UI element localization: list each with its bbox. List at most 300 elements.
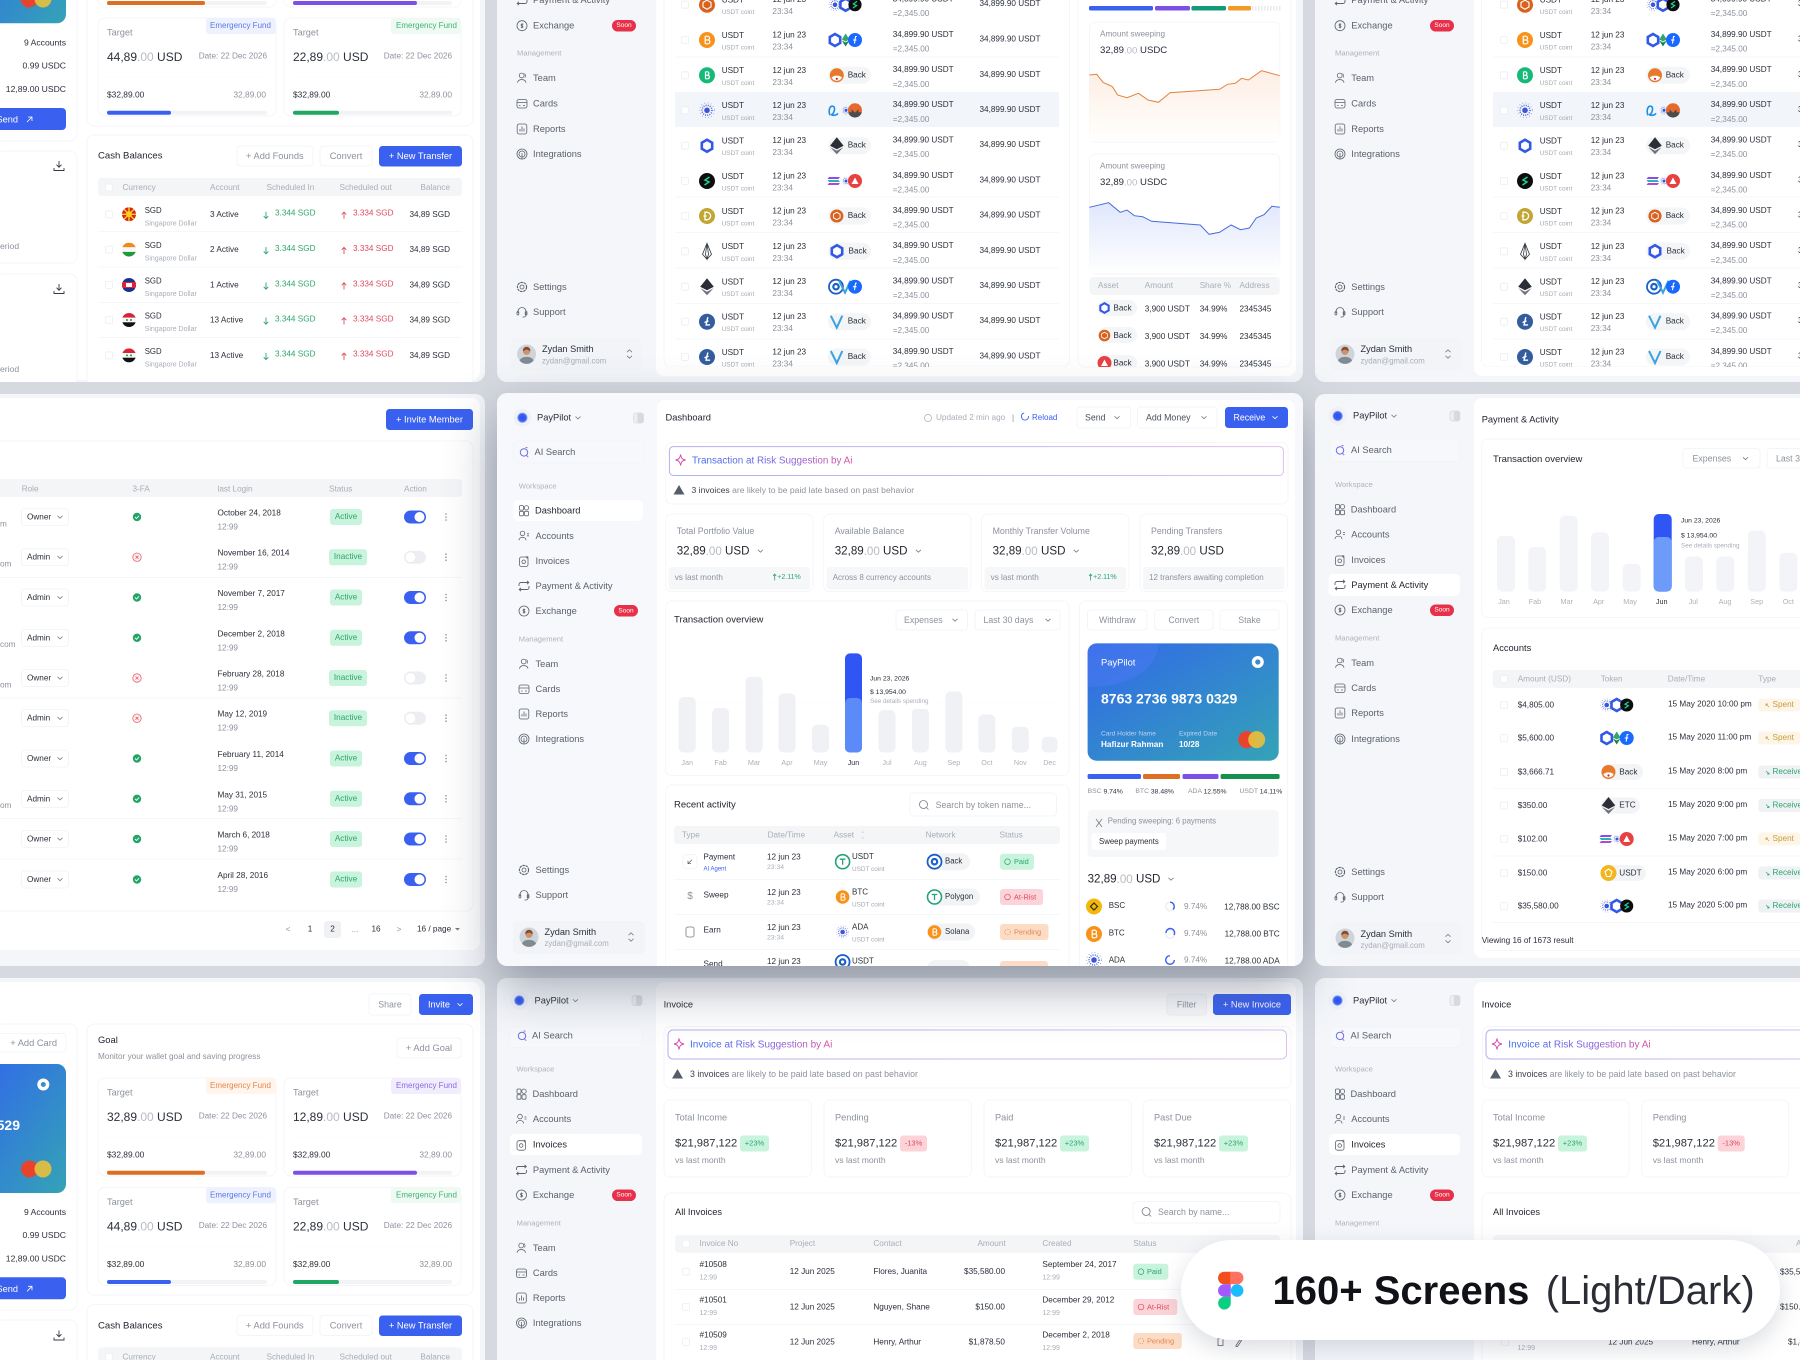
account row: $4,805.00 (1518, 700, 1555, 710)
member row (22, 670, 447, 692)
stat card: pending transfers: 32,89.00 USD (1151, 544, 1224, 558)
coin row (682, 206, 1040, 230)
panel: sweep analytics: Share % (1200, 281, 1231, 290)
panel: transaction overview bar chart: Expenses (1692, 454, 1732, 464)
coin row: =2,345.00 (1711, 220, 1748, 230)
invoice row: $35,580.00 (964, 1267, 1005, 1276)
stat card: monthly transfer volume: +2.11% (1093, 574, 1117, 581)
asset table: Back (1113, 331, 1133, 340)
coin row (682, 171, 1040, 194)
chart tooltip (1675, 514, 1748, 555)
invoice row: Flores, Juanita (873, 1267, 928, 1276)
panel: transaction overview bar chart: Apr (781, 758, 793, 767)
asset list: 9.74% (1184, 956, 1207, 964)
asset balance total: 32,89.00 USD (1088, 872, 1160, 886)
coin row: =2,345.00 (893, 326, 930, 335)
member row: November 16, 2014 (218, 549, 290, 558)
member row: Owner (27, 875, 51, 884)
member row: February 28, 2018 (218, 670, 285, 678)
invoice row: 12 Jun 2025 (790, 1302, 835, 1312)
panel: transaction overview bar chart: May (1623, 597, 1637, 606)
stat card: total income: +23% (1563, 1138, 1583, 1148)
coin row: 12 jun 23 (1591, 348, 1625, 356)
member row: Owner (27, 834, 51, 844)
coin row: 34,899.90 USDT (1711, 277, 1772, 286)
coin row: 34,899.90 USDT (980, 140, 1040, 149)
account row: USDT (1619, 868, 1642, 878)
stat card: total portfolio value: vs last month (675, 573, 723, 582)
coin row: 34,899.90 USDT (893, 171, 954, 180)
member row (22, 508, 447, 532)
page header (666, 407, 1288, 428)
target card green: $32,89.00 (293, 90, 331, 100)
AI suggestion panel: Invoice at Risk Suggestion by Ai (1508, 1040, 1651, 1050)
stat card: available balance: Available Balance (835, 526, 905, 536)
asset list: 12,788.00 BTC (1225, 930, 1280, 938)
sidebar navigation: Workspace (519, 482, 557, 490)
invoice row: 12:99 (700, 1345, 717, 1352)
panel: cash balances: Cash Balances (98, 150, 163, 162)
coin row: Back (848, 246, 868, 255)
panel: goal targets (87, 0, 473, 126)
coin row: 34,899.90 USDT (893, 30, 954, 39)
statement cards with download icons: eriod (0, 364, 19, 374)
coin row highlighted: USDT coint (1540, 115, 1572, 122)
page header: Receive (1234, 412, 1265, 422)
sidebar navigation: Management (1335, 1218, 1380, 1228)
callout: 160+ screens pill (1181, 1240, 1780, 1340)
stat card: past due: $21,987,122 (1154, 1138, 1216, 1150)
coin row: 23:34 (1591, 218, 1612, 228)
coin row: 23:34 (1591, 184, 1612, 192)
sidebar navigation: Payment & Activity (533, 1165, 610, 1175)
coin row (1500, 241, 1800, 265)
panel: transaction overview bar chart: Fab (1529, 597, 1541, 606)
coin row (1500, 0, 1800, 18)
sidebar navigation: zydan@gmail.com (542, 356, 606, 366)
coin row: USDT coint (1540, 9, 1572, 16)
panel: accounts table: Type (1758, 674, 1776, 684)
member row: Active (335, 633, 358, 642)
panel: accounts table: Accounts (1493, 643, 1532, 653)
coin row: USDT coint (722, 362, 754, 368)
coin row: =2,345.00 (1711, 150, 1748, 159)
sidebar navigation: Workspace (1335, 480, 1373, 489)
panel: all invoices table: All Invoices (1493, 1207, 1540, 1217)
member row: 12:99 (218, 844, 238, 854)
member row: 12:99 (218, 643, 238, 652)
sidebar navigation: Team (533, 1243, 556, 1253)
cash row: 3.334 SGD (353, 350, 394, 359)
activity row: sweep: $ (687, 891, 693, 902)
coin row: 23:34 (1591, 42, 1612, 52)
pagination: ... (352, 925, 358, 934)
target card purple: Target (293, 1088, 319, 1098)
panel: transaction overview bar chart: Oct (981, 758, 992, 767)
activity row: payment (683, 852, 1034, 873)
stat card: past due: +23% (1224, 1138, 1244, 1148)
activity row: earn: 12 jun 23 (767, 923, 801, 932)
cash row: Singapore Dollar (145, 361, 198, 368)
cash row (106, 312, 450, 333)
invoice row (682, 1260, 1168, 1282)
stat card: pending (824, 1100, 972, 1177)
stat card: total portfolio value: +2.11% (777, 574, 801, 581)
activity row: payment: AI Agent (704, 867, 727, 873)
panel: payment and activity screen, middle right (1315, 394, 1800, 966)
coin row: Back (1666, 352, 1685, 361)
activity row: send (704, 955, 1048, 977)
panel: all invoices table: Henry, Arthur (1692, 1338, 1740, 1346)
coin row: 12 jun 23 (1591, 66, 1625, 75)
sidebar navigation: Integrations (533, 1318, 582, 1328)
panel: transaction overview bar chart: Mar (1561, 597, 1573, 606)
activity row: earn: USDT coint (852, 936, 885, 944)
page header with filter and new invoice buttons: Filter (1177, 1000, 1197, 1010)
member row: Owner (27, 674, 51, 682)
AI suggestion panel: 3 invoices are likely to be paid late based on past behavior (1508, 1069, 1736, 1079)
target card green: $32,89.00 (293, 1259, 331, 1269)
activity row: send: Send (704, 960, 723, 968)
cash row: 3.344 SGD (275, 244, 316, 253)
coin row (681, 348, 1040, 367)
sidebar navigation: Zydan Smith (1360, 344, 1412, 354)
coin row: =2,345.00 (893, 186, 930, 194)
panel: card and asset summary: Stake (1238, 615, 1261, 625)
account row: 15 May 2020 9:00 pm (1668, 800, 1747, 809)
target card green: Emergency Fund (396, 1190, 457, 1199)
pending sweeping box: Pending sweeping: 6 payments (1108, 816, 1216, 826)
panel: accounts table (1482, 628, 1800, 950)
sidebar navigation: Exchange (536, 606, 577, 616)
coin row: Back (1666, 317, 1685, 326)
sidebar navigation: PayPilot (1353, 410, 1388, 420)
cash row: 3.344 SGD (275, 314, 316, 323)
activity row: sweep: 12 jun 23 (767, 888, 801, 897)
sidebar navigation: Invoices (1351, 1140, 1386, 1150)
coin row: 34,899.90 USDT (1711, 206, 1772, 215)
coin row: USDT (1540, 31, 1562, 40)
coin row highlighted: 12 jun 23 (1591, 101, 1625, 110)
target card green: Target (293, 1197, 319, 1207)
panel: all invoices table: 12 Jun 2025 (1608, 1338, 1654, 1346)
panel: members table: Action (404, 484, 427, 493)
panel: transaction overview bar chart: Aug (1719, 597, 1731, 606)
panel: transaction overview bar chart: Jan (1498, 597, 1510, 606)
coin row: 34,899.90 USDT (980, 70, 1040, 79)
coin row (682, 65, 1040, 89)
stat card: past due (1143, 1100, 1291, 1177)
panel: accounts table: Token (1601, 674, 1623, 684)
cash row (106, 206, 450, 227)
asset list: 9.74% (1184, 902, 1207, 911)
sidebar navigation: Soon (1434, 22, 1450, 29)
coin row: USDT (1540, 136, 1562, 145)
target card purple: 12,89.00 USD (293, 1110, 369, 1124)
cash row: SGD (145, 347, 162, 356)
member row: Active (335, 794, 358, 803)
panel: transaction overview bar chart: Jun (848, 758, 859, 767)
panel: transaction overview bar chart: Apr (1593, 597, 1605, 606)
activity row: earn: Pending (1014, 928, 1041, 936)
sidebar navigation: Integrations (533, 149, 582, 159)
coin row: USDT coint (722, 150, 754, 157)
panel: transaction overview bar chart: Jun (1656, 597, 1667, 606)
coin row: 12 jun 23 (772, 277, 807, 286)
account row: 15 May 2020 11:00 pm (1668, 732, 1751, 742)
coin row: 34,899.90 USDT (893, 241, 954, 250)
coin row: USDT (1540, 242, 1562, 251)
page header with filter and new invoice buttons: Invoice (664, 1000, 693, 1010)
invoice row: 12:99 (1042, 1345, 1060, 1352)
panel: goal targets: Goal (98, 1034, 118, 1045)
cash row (106, 276, 450, 298)
panel: all invoices table (664, 1193, 1291, 1360)
account row: 15 May 2020 6:00 pm (1668, 868, 1747, 876)
panel: all invoices table: Project (790, 1239, 816, 1248)
activity row: payment: 23:34 (767, 864, 784, 871)
sidebar navigation: PayPilot (1353, 996, 1388, 1006)
account row: $3,666.71 (1518, 768, 1555, 776)
sidebar navigation: AI Search (1351, 445, 1392, 455)
sidebar navigation: Workspace (1335, 1064, 1373, 1074)
coin row: USDT (722, 278, 744, 287)
coin row: 34,899.90 USDT (893, 312, 954, 321)
sidebar navigation: Reports (1351, 708, 1384, 718)
sidebar navigation: Soon (1434, 606, 1450, 614)
share and invite buttons: Invite (428, 1000, 450, 1010)
sidebar navigation: Dashboard (535, 506, 580, 516)
member row: Admin (27, 794, 51, 803)
member row: December 2, 2018 (218, 629, 285, 638)
sidebar navigation: AI Search (1350, 1030, 1391, 1040)
sidebar navigation: Exchange (1351, 1190, 1393, 1200)
coin row: USDT (722, 31, 744, 40)
coin row: 34,899.90 USDT (1711, 30, 1772, 39)
target card purple: $32,89.00 (293, 1150, 331, 1160)
coin row: 34,899.90 USDT (980, 316, 1040, 325)
invoice row: 12 Jun 2025 (790, 1267, 835, 1276)
callout text: (Light/Dark) (1546, 1269, 1755, 1313)
panel: sweep analytics (1078, 0, 1291, 371)
target card blue (98, 18, 276, 116)
invoice row: $150.00 (975, 1302, 1005, 1312)
target card blue: 32,89.00 (233, 1259, 266, 1269)
target card blue: Emergency Fund (210, 1190, 271, 1199)
coin row: 12 jun 23 (772, 242, 807, 251)
sidebar navigation: Cards (1351, 683, 1376, 693)
coin row: USDT (1540, 172, 1562, 181)
panel: recent activity table: Network (926, 830, 957, 840)
sidebar navigation: Zydan Smith (544, 927, 596, 937)
coin row: =2,345.00 (893, 220, 930, 230)
coin row: 34,899.90 USDT (980, 246, 1040, 255)
coin row: =2,345.00 (1711, 80, 1748, 89)
page heading: Invoice (1482, 1000, 1511, 1010)
panel: members table: 3-FA (132, 484, 150, 493)
target card orange (98, 1078, 276, 1176)
coin row: 34,899.90 USDT (893, 206, 954, 215)
panel: cash balances: + New Transfer (389, 1320, 452, 1330)
panel: invoices screen, bottom centre (497, 978, 1303, 1360)
wallet card (0, 1024, 77, 1360)
coin row: 34,899.90 USDT (893, 277, 954, 286)
stat card: monthly transfer volume (982, 514, 1129, 592)
stat card: pending: $21,987,122 (835, 1138, 897, 1150)
stat card: total income: Total Income (1493, 1113, 1545, 1123)
coin row: 23:34 (1591, 78, 1612, 87)
coin row: =2,345.00 (893, 44, 930, 54)
coin row: USDT coint (1540, 150, 1572, 157)
stat card: paid: vs last month (995, 1155, 1046, 1165)
sidebar navigation: Team (1351, 73, 1374, 83)
cash row: 13 Active (210, 316, 244, 324)
account row: $5,600.00 (1518, 734, 1555, 742)
coin row: USDT coint (722, 80, 754, 87)
invoice row: 12:99 (1042, 1310, 1060, 1317)
sidebar navigation: Dashboard (532, 1089, 578, 1099)
panel: card and asset summary: Withdraw (1099, 615, 1136, 625)
panel: cash balances: Balance (420, 183, 450, 192)
target card green (284, 18, 461, 116)
member row (22, 830, 447, 854)
coin row: =2,345.00 (1711, 291, 1748, 300)
stat card: pending: Pending (1653, 1113, 1686, 1123)
wallet card: + Add Card (10, 1038, 57, 1048)
member row: Inactive (334, 673, 363, 682)
coin row: =2,345.00 (1711, 44, 1748, 54)
wallet card with send button: 0.99 USDC (23, 60, 66, 70)
activity row: payment: Payment (704, 853, 736, 862)
credit card: 10/28 (1179, 740, 1200, 749)
coin row: USDT (1540, 278, 1562, 287)
member row: Admin (27, 633, 51, 642)
coin row: 34,899.90 USDT (1711, 241, 1772, 250)
coin row: 12 jun 23 (772, 206, 807, 216)
coin row: 12 jun 23 (772, 30, 807, 40)
member row: Active (335, 754, 358, 762)
activity row: sweep: 23:34 (767, 900, 784, 906)
sidebar navigation: zydan@gmail.com (544, 939, 609, 948)
sidebar navigation: Team (533, 73, 556, 83)
invoice row: Nguyen, Shane (873, 1302, 930, 1312)
coin row: 23:34 (772, 324, 793, 333)
activity row: payment: USDT coint (852, 866, 885, 873)
coin row: 12 jun 23 (1591, 206, 1625, 216)
page header with filter and new invoice buttons (664, 994, 1291, 1015)
page header with filter and new invoice buttons: + New Invoice (1223, 1000, 1281, 1010)
panel: cash balances: Account (210, 183, 240, 192)
credit card: Hafizur Rahman (1101, 740, 1163, 749)
coin row: 12 jun 23 (772, 172, 807, 180)
sidebar navigation: Settings (1351, 282, 1385, 292)
member row (22, 750, 447, 773)
member row (22, 871, 447, 894)
chart tooltip (864, 672, 937, 709)
chart tooltip: $ 13,954.00 (870, 689, 906, 696)
coin row (682, 0, 1040, 18)
member row: Active (335, 592, 358, 602)
stat card: available balance: Across 8 currency accounts (833, 573, 931, 582)
activity row: payment: Back (945, 857, 962, 866)
pagination: 1 (308, 924, 313, 934)
sidebar navigation: Reports (536, 709, 568, 719)
panel: members table: om (0, 560, 12, 568)
invoice row: Henry, Arthur (873, 1338, 921, 1346)
coin row: =2,345.00 (893, 80, 930, 89)
stat card: pending (1642, 1100, 1789, 1177)
panel: recent activity table: Type (682, 830, 700, 840)
activity row: sweep: Sweep (704, 890, 729, 900)
target card green: Emergency Fund (396, 21, 457, 30)
invoice row: Paid (1147, 1267, 1162, 1276)
coin row: 23:34 (772, 7, 793, 16)
asset list: 12,788.00 ADA (1225, 956, 1280, 966)
target card blue: 44,89.00 USD (107, 50, 183, 64)
sidebar navigation: zydan@gmail.com (1360, 356, 1425, 366)
sidebar navigation: Reports (533, 124, 566, 134)
statement cards with download icons (0, 151, 77, 404)
panel: all invoices table: Invoice No (700, 1239, 739, 1248)
sidebar navigation: Management (1335, 634, 1380, 642)
page header: Dashboard (666, 412, 711, 422)
stat card: total income: vs last month (675, 1155, 726, 1165)
panel: all invoices table (1482, 1193, 1800, 1360)
sidebar navigation: Soon (1434, 1192, 1450, 1199)
target card green: 32,89.00 (419, 90, 452, 100)
cash row: 3.334 SGD (353, 244, 394, 253)
sidebar navigation: AI Search (532, 1030, 573, 1040)
invite member button: + Invite Member (396, 414, 463, 424)
invoice row: $1,878.50 (969, 1338, 1005, 1346)
target card orange: Date: 22 Dec 2026 (199, 1112, 267, 1120)
page header: | (1012, 414, 1014, 422)
account row (1500, 764, 1800, 780)
coin row highlighted: =2,345.00 (1711, 115, 1748, 124)
coin row: USDT coint (1540, 80, 1572, 87)
coin row: =2,345.00 (893, 9, 930, 18)
sidebar navigation: Reports (1351, 124, 1384, 134)
stat card: pending transfers: Pending Transfers (1151, 526, 1223, 536)
coin row: USDT coint (722, 291, 754, 298)
pagination: 16 / page (417, 924, 452, 934)
stat card: total portfolio value (666, 514, 813, 592)
coin row highlighted: USDT (1540, 101, 1562, 110)
panel: accounts table: Date/Time (1668, 674, 1706, 684)
coin row: =2,345.00 (1711, 362, 1748, 370)
coin row (1500, 171, 1800, 194)
coin row: =2,345.00 (893, 362, 930, 370)
coin row: USDT (1540, 207, 1562, 216)
coin row: 23:34 (772, 42, 793, 52)
member row: 12:99 (218, 804, 238, 813)
panel: cash balances: Convert (330, 151, 363, 161)
panel: card and asset summary: Convert (1168, 615, 1200, 625)
activity row: earn: ADA (852, 922, 869, 932)
coin row: =2,345.00 (1711, 9, 1748, 18)
coin row highlighted: USDT coint (722, 115, 754, 122)
pagination: 16 (371, 924, 381, 934)
coin row (682, 276, 1040, 300)
panel: dashboard screen, centre (497, 393, 1303, 986)
asset table: 2345345 (1240, 304, 1272, 314)
panel: recent activity table: Status (1000, 830, 1023, 840)
target card orange: 32,89.00 USD (107, 1110, 183, 1124)
account row: Spent (1772, 733, 1795, 742)
sidebar navigation (1328, 992, 1461, 1228)
coin row: 34,899.90 USDT (1711, 135, 1772, 144)
asset list (1086, 898, 1280, 967)
